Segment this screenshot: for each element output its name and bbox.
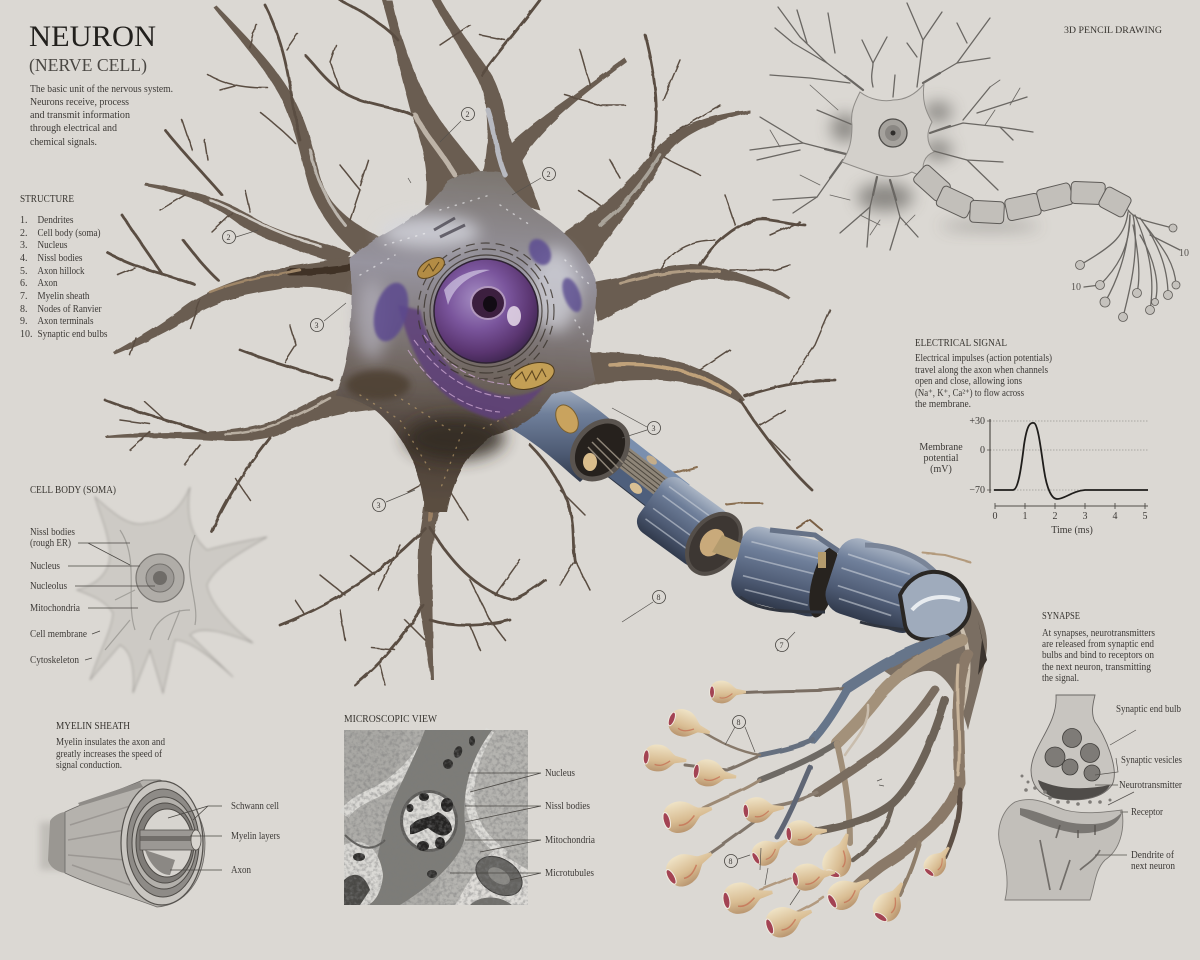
micrograph grain bbox=[344, 730, 528, 905]
mitochondria in bulb bbox=[1045, 728, 1100, 781]
intro text bbox=[30, 84, 173, 148]
number badges and leaders: 3 bbox=[376, 501, 380, 510]
micrograph nucleus bbox=[400, 790, 458, 852]
structure list: 8. bbox=[20, 304, 28, 315]
action potential chart bbox=[919, 416, 1148, 536]
dendrite highlights bbox=[210, 110, 730, 520]
number badges and leaders: 2 bbox=[546, 170, 550, 179]
action potential chart: −70 bbox=[969, 485, 985, 496]
synapse labels: Receptor bbox=[1131, 807, 1164, 818]
number badges and leaders: 3 bbox=[652, 424, 656, 433]
structure list: Axon hillock bbox=[38, 266, 84, 277]
action potential chart: 0 bbox=[992, 511, 998, 522]
soma labels: Cytoskeleton bbox=[30, 655, 79, 666]
action potential chart: 1 bbox=[1022, 511, 1028, 522]
myelin description bbox=[56, 737, 165, 771]
electrical signal description: the membrane. bbox=[915, 399, 971, 410]
pencil soma bbox=[842, 84, 934, 178]
title: (NERVE CELL) bbox=[29, 55, 147, 76]
intro text: Neurons receive, process bbox=[30, 97, 129, 108]
intro text: through electrical and bbox=[30, 123, 117, 134]
number badges and leaders: 8 bbox=[728, 857, 732, 866]
concentric nuclear rings bbox=[418, 243, 554, 379]
exposed fibres bbox=[712, 535, 745, 560]
thick dendrite trunks bbox=[105, 0, 790, 680]
synapse labels: Neurotransmitter bbox=[1119, 780, 1183, 791]
myelin segment 3 bbox=[820, 533, 940, 638]
twigs, medium bbox=[105, 0, 835, 685]
synapse description: At synapses, neurotransmitters bbox=[1042, 628, 1155, 639]
structure list: 6. bbox=[20, 278, 28, 289]
synapse description: the next neuron, transmitting bbox=[1042, 662, 1151, 673]
twigs on axon bbox=[660, 467, 970, 562]
structure list bbox=[20, 194, 108, 340]
action potential chart: 5 bbox=[1142, 511, 1148, 522]
intro text: and transmit information bbox=[30, 110, 130, 121]
panel: 3D pencil drawing bbox=[750, 3, 1189, 322]
synapse description bbox=[1042, 628, 1155, 684]
heading: synapse: SYNAPSE bbox=[1042, 611, 1080, 622]
synapse labels bbox=[1095, 704, 1183, 872]
electrical signal description: (Na⁺, K⁺, Ca²⁺) to flow across bbox=[915, 388, 1024, 399]
axon terminal branches bbox=[685, 640, 968, 912]
structure list: 2. bbox=[20, 228, 28, 239]
axon: fibre bundle and tray bbox=[584, 423, 690, 519]
pencil nucleus bbox=[879, 119, 907, 147]
heading: 3D pencil drawing: 3D PENCIL DRAWING bbox=[1064, 25, 1163, 35]
myelin labels bbox=[168, 801, 280, 876]
structure list: Nissl bodies bbox=[38, 253, 83, 264]
myelin segment 1 bbox=[631, 471, 752, 584]
heading: microscopic view: MICROSCOPIC VIEW bbox=[344, 714, 438, 725]
synapse drawing bbox=[999, 695, 1123, 900]
structure list: Nucleus bbox=[38, 240, 68, 251]
action potential chart: (mV) bbox=[930, 464, 952, 475]
micrograph mitochondrion bbox=[469, 848, 529, 904]
number badges and leaders: 3 bbox=[314, 321, 318, 330]
nucleus bbox=[434, 259, 538, 363]
action potential chart: 3 bbox=[1082, 511, 1088, 522]
intro text: The basic unit of the nervous system. bbox=[30, 84, 173, 95]
action potential chart: 2 bbox=[1052, 511, 1058, 522]
myelin rings bbox=[121, 781, 203, 905]
action potential curve bbox=[994, 423, 1148, 499]
axon opening ring bbox=[561, 410, 639, 490]
axon end cone bbox=[880, 590, 987, 730]
synapse description: are released from synaptic end bbox=[1042, 639, 1154, 650]
heading: electrical signal: ELECTRICAL SIGNAL bbox=[915, 338, 1007, 349]
structure list: 1. bbox=[20, 215, 28, 226]
soma speckle texture bbox=[360, 195, 590, 490]
upper bulb bbox=[1031, 695, 1114, 800]
heading: cell body: CELL BODY (SOMA) bbox=[30, 485, 116, 496]
number badges and leaders: 2 bbox=[226, 233, 230, 242]
pencil dendrites bbox=[750, 3, 1033, 250]
structure list: 10. bbox=[20, 329, 32, 340]
soma shading bbox=[380, 216, 480, 248]
panel: myelin sheath bbox=[40, 721, 280, 907]
synapse labels: next neuron bbox=[1131, 861, 1175, 872]
number badges and leaders: 8 bbox=[656, 593, 660, 602]
synapse description: bulbs and bind to receptors on bbox=[1042, 650, 1154, 661]
myelin labels: Axon bbox=[231, 865, 251, 876]
electrical signal description bbox=[915, 353, 1052, 410]
structure list: Synaptic end bulbs bbox=[38, 329, 108, 340]
soma labels: Cell membrane bbox=[30, 629, 88, 640]
soma labels: Nucleolus bbox=[30, 581, 67, 592]
action potential chart: Membrane bbox=[919, 442, 963, 453]
structure list: Myelin sheath bbox=[38, 291, 90, 302]
twigs, fine bbox=[118, 24, 830, 685]
action potential chart: Time (ms) bbox=[1051, 525, 1093, 536]
soma sketch bbox=[77, 487, 267, 693]
electrical signal description: Electrical impulses (action potentials) bbox=[915, 353, 1052, 364]
structure list: STRUCTURE bbox=[20, 194, 74, 205]
structure list: Axon terminals bbox=[38, 316, 94, 327]
intro text: chemical signals. bbox=[30, 137, 97, 148]
nucleolus bbox=[471, 287, 505, 319]
myelin description: Myelin insulates the axon and bbox=[56, 737, 165, 748]
axon hillock bbox=[505, 385, 628, 482]
myelin description: signal conduction. bbox=[56, 760, 122, 771]
micrograph labels bbox=[450, 768, 596, 880]
structure list: 3. bbox=[20, 240, 28, 251]
action potential chart: 0 bbox=[980, 445, 985, 456]
structure list: Dendrites bbox=[38, 215, 74, 226]
main neuron illustration bbox=[105, 0, 987, 942]
structure list: 4. bbox=[20, 253, 28, 264]
synapse labels: Dendrite of bbox=[1131, 850, 1175, 861]
mitochondria bbox=[414, 253, 558, 395]
pencil axon terminals bbox=[1071, 210, 1189, 322]
panel: microscopic view bbox=[344, 714, 596, 905]
synaptic end bulbs bbox=[642, 681, 957, 942]
action potential chart: 4 bbox=[1112, 511, 1118, 522]
synapse labels: Synaptic vesicles bbox=[1121, 755, 1182, 766]
micrograph labels: Microtubules bbox=[545, 868, 594, 879]
soma labels bbox=[30, 527, 155, 666]
dendrites bbox=[105, 0, 970, 685]
micrograph labels: Mitochondria bbox=[545, 835, 596, 846]
panel: electrical signal bbox=[915, 338, 1148, 536]
axon rod bbox=[140, 830, 196, 850]
action potential chart: +30 bbox=[969, 416, 985, 427]
nissl bodies bbox=[368, 218, 586, 420]
soma labels: Nucleus bbox=[30, 561, 60, 572]
soma sketch nucleus bbox=[136, 554, 184, 602]
myelin labels: Schwann cell bbox=[231, 801, 279, 812]
soma labels: Mitochondria bbox=[30, 603, 81, 614]
panel: cell body (soma) bbox=[30, 485, 267, 693]
pencil myelin segments bbox=[912, 163, 1133, 224]
electrical signal description: open and close, allowing ions bbox=[915, 376, 1022, 387]
soma (cell body) bbox=[335, 171, 596, 512]
number badges and leaders bbox=[222, 108, 884, 905]
structure list: 9. bbox=[20, 316, 28, 327]
title: NEURON bbox=[29, 20, 156, 53]
pencil shading bbox=[831, 102, 1040, 229]
synapse labels: Synaptic end bulb bbox=[1116, 704, 1181, 715]
structure list: 7. bbox=[20, 291, 28, 302]
structure list: Nodes of Ranvier bbox=[38, 304, 102, 315]
soma labels: (rough ER) bbox=[30, 538, 71, 549]
number badges and leaders: 7 bbox=[780, 641, 784, 650]
micrograph bbox=[344, 730, 529, 905]
structure list: Axon bbox=[38, 278, 58, 289]
axon bbox=[505, 385, 987, 730]
lower dendrite bbox=[999, 800, 1123, 900]
synapse description: the signal. bbox=[1042, 673, 1079, 684]
number badges and leaders: 8 bbox=[736, 718, 740, 727]
pencil axon terminals: 10 bbox=[1179, 248, 1189, 259]
myelin description: greatly increases the speed of bbox=[56, 749, 163, 760]
action potential chart: potential bbox=[924, 453, 959, 464]
myelin segment 2 bbox=[727, 523, 845, 621]
structure list: 5. bbox=[20, 266, 28, 277]
vesicles and neurotransmitter bbox=[1020, 774, 1112, 806]
myelin cylinder drawing bbox=[40, 780, 205, 907]
heading: myelin sheath: MYELIN SHEATH bbox=[56, 721, 130, 732]
micrograph labels: Nissl bodies bbox=[545, 801, 590, 812]
panel: synapse bbox=[999, 611, 1183, 900]
micrograph labels: Nucleus bbox=[545, 768, 575, 779]
soma labels: Nissl bodies bbox=[30, 527, 75, 538]
myelin labels: Myelin layers bbox=[231, 831, 280, 842]
pencil axon terminals: 10 bbox=[1071, 282, 1081, 293]
structure list: Cell body (soma) bbox=[38, 228, 100, 239]
number badges and leaders: 2 bbox=[466, 110, 470, 119]
electrical signal description: travel along the axon when channels bbox=[915, 365, 1048, 376]
axon bend bbox=[900, 572, 970, 639]
title bbox=[29, 20, 156, 76]
